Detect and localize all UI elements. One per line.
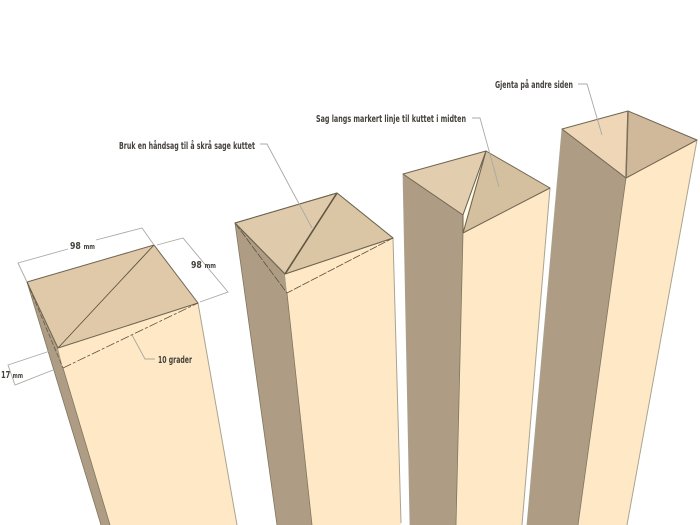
- post 4 top left face: [562, 111, 628, 178]
- post 1 dashed cutting line: [63, 303, 198, 368]
- post 2: first saw cut: [235, 193, 401, 525]
- callout: sag langs linje: [316, 114, 499, 187]
- post 2 top face: [235, 193, 393, 274]
- callout: håndsag: [119, 141, 312, 228]
- post 1: marked post with dimensions: [27, 245, 237, 525]
- post 4 side face: [527, 129, 626, 525]
- dimension: 17 mm: 17 mm: [1, 370, 23, 381]
- dimension: 98 mm right: [157, 238, 228, 302]
- callout: gjenta: [495, 80, 602, 135]
- post 2 saw cut: [285, 193, 337, 274]
- post 1 top face: [27, 245, 198, 348]
- dimension: 98 mm top: 98 mm: [70, 241, 95, 252]
- dimension: 98 mm top: [18, 228, 154, 282]
- callout: 10 grader: 10 grader: [158, 355, 192, 366]
- post 4: repeated on the other side: [527, 111, 697, 525]
- callout: 10 grader: [132, 335, 192, 366]
- post 3 top right face: [463, 151, 550, 233]
- post 3: cut towards the middle: [403, 151, 550, 525]
- post 2 front face: [285, 238, 401, 525]
- post 4 front face: [578, 140, 697, 525]
- callout: håndsag: Bruk en håndsag til å skrå sage kuttet: [119, 141, 255, 152]
- post 4 top right face: [626, 111, 697, 178]
- post 4 centre seam: [626, 111, 628, 178]
- post 1 diagonal line: [58, 245, 154, 348]
- post 1 front face: [58, 303, 237, 525]
- post 2 dashed lines: [235, 223, 393, 293]
- post 3 open saw cut: [463, 151, 486, 233]
- dimension: 17 mm: [1, 351, 53, 385]
- dimension: 98 mm right: 98 mm: [191, 260, 216, 271]
- post 3 top left face: [403, 151, 486, 215]
- callout: sag langs linje: Sag langs markert linje til kuttet i midten: [316, 114, 466, 125]
- post 1 side face: [27, 282, 110, 525]
- post 3 side face: [403, 174, 463, 525]
- callout: gjenta: Gjenta på andre siden: [495, 80, 573, 91]
- post 3 front face: [456, 188, 550, 525]
- post 2 side face: [235, 223, 312, 525]
